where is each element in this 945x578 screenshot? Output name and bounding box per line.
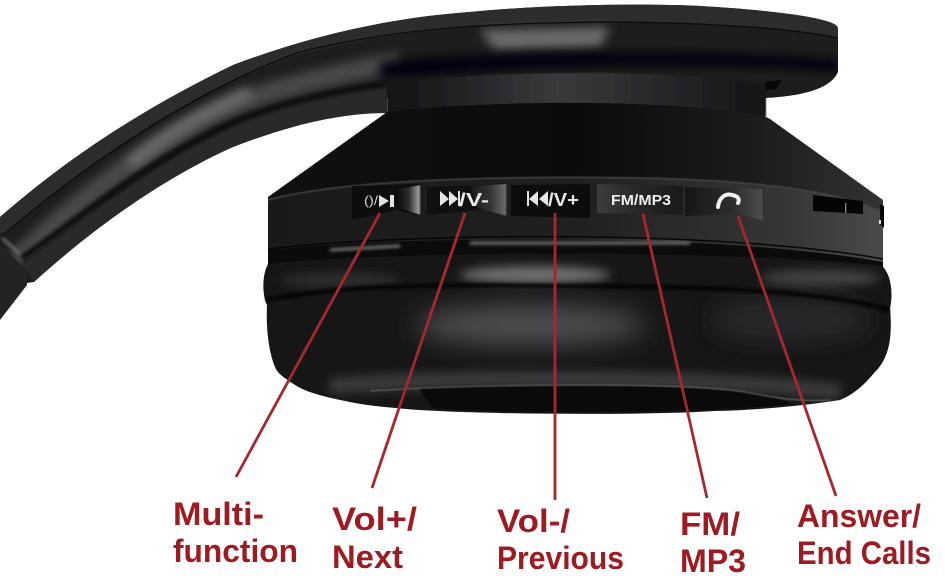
rim dark line (268, 237, 883, 259)
label: answer end calls: End Calls (797, 535, 931, 571)
label: vol- previous (497, 503, 624, 576)
ear cup cone (268, 103, 883, 262)
icon: phone (718, 195, 739, 207)
button glyphs: previous (527, 191, 548, 206)
cushion seam (266, 285, 889, 310)
label: multi-function: Multi- (173, 496, 264, 532)
button: vol minus / next: /V- (459, 190, 489, 210)
label: multi-function (173, 496, 298, 569)
button: vol plus / previous (511, 184, 590, 218)
ear cup neck (387, 73, 766, 117)
band seam (2, 22, 838, 236)
line: fm mp3 (643, 214, 707, 498)
cushion body (263, 254, 891, 414)
plate highlight (480, 27, 610, 50)
label: answer end calls: Answer/ (797, 498, 921, 534)
slot switch (845, 203, 846, 213)
side port (880, 204, 884, 228)
label: fm mp3: FM/ (680, 506, 740, 542)
label: vol+ next (332, 501, 417, 575)
cushion (263, 254, 891, 414)
line: answer end calls (738, 216, 836, 496)
band top facet (0, 5, 838, 235)
button: vol plus / previous: /V+ (548, 190, 579, 210)
cushion shading (280, 266, 880, 392)
label: vol+ next: Next (332, 539, 403, 575)
side slot (813, 195, 863, 214)
button glyphs: power play: ()/ (364, 193, 378, 208)
button: answer (685, 187, 763, 221)
rim light edge (268, 177, 883, 212)
rim streak (330, 243, 690, 250)
inner opening (419, 385, 792, 412)
label: multi-function: function (173, 533, 298, 569)
hinge highlight (2, 238, 20, 254)
label: vol+ next: Vol+/ (332, 501, 417, 537)
band inner dark line (22, 84, 387, 258)
button: multi-function (352, 184, 421, 220)
rim groove (268, 239, 883, 272)
band highlight bright (130, 92, 250, 165)
cushion lower sheen (415, 305, 645, 345)
ear cup control band (268, 177, 883, 262)
cushion bottom light (330, 379, 840, 392)
button strip (352, 184, 763, 221)
headband arm (0, 5, 838, 283)
screw (765, 80, 782, 90)
label: fm mp3: MP3 (680, 543, 746, 578)
line: vol+ next (372, 213, 465, 488)
cushion lower right sheen (710, 300, 870, 340)
hinge piece (0, 246, 27, 320)
callout lines (236, 213, 836, 500)
opening rim light (370, 385, 830, 401)
button: fm mp3: FM/MP3 (611, 192, 671, 209)
plate dark lower (380, 52, 838, 80)
label: vol- previous: Vol-/ (497, 503, 570, 539)
port light (879, 220, 881, 224)
button: fm mp3 (597, 184, 683, 215)
band long highlight (15, 62, 400, 262)
button glyphs: next (440, 191, 460, 206)
band outer silhouette (0, 5, 838, 283)
cushion upper left sheen (280, 273, 400, 287)
band clipped shading (15, 27, 838, 262)
band inner facet (22, 86, 387, 282)
line: multi-function (236, 213, 380, 477)
labels (173, 496, 931, 578)
label: vol- previous: Previous (497, 540, 624, 576)
line: vol- previous (554, 213, 556, 500)
label: fm mp3 (680, 506, 746, 578)
label: answer end calls (797, 498, 931, 571)
cushion upper highlight (460, 266, 610, 284)
cushion upper right highlight (760, 270, 880, 286)
button: vol minus / next (427, 184, 507, 216)
